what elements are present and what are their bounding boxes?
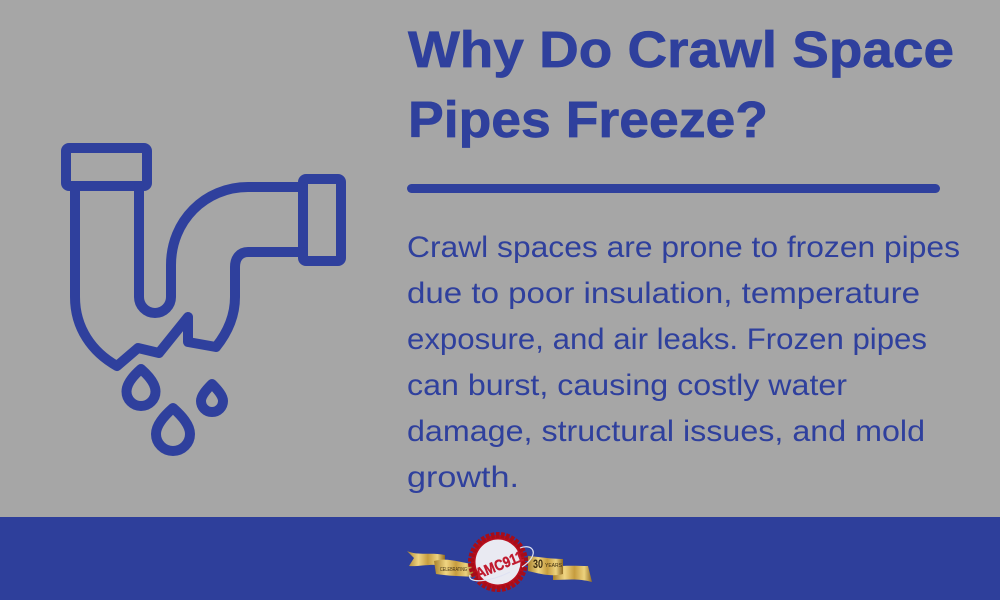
water drop bottom bbox=[156, 408, 190, 451]
title bbox=[408, 21, 954, 148]
body line 6: growth. bbox=[407, 461, 519, 494]
logo: AMC911 anniversary badge bbox=[407, 535, 592, 589]
ribbon right band bbox=[528, 556, 563, 575]
globe bbox=[476, 540, 520, 584]
body line 2: due to poor insulation, temperature bbox=[407, 277, 920, 310]
left pipe cap bbox=[66, 148, 147, 186]
body line 3: exposure, and air leaks. Frozen pipes bbox=[407, 323, 927, 356]
divider rule bbox=[407, 184, 940, 193]
body line 5: damage, structural issues, and mold bbox=[407, 415, 925, 448]
body line 1: Crawl spaces are prone to frozen pipes bbox=[407, 231, 960, 264]
word years: YEARS bbox=[545, 563, 563, 569]
water drop left bbox=[126, 369, 156, 406]
number 30: 30 bbox=[533, 557, 543, 571]
orbit swoosh bbox=[470, 547, 533, 581]
ribbon right tail bbox=[553, 566, 592, 582]
right pipe cap bbox=[303, 179, 341, 261]
body line 4: can burst, causing costly water bbox=[407, 369, 847, 402]
ribbon text right bbox=[533, 557, 563, 571]
title line 1: Why Do Crawl Space bbox=[408, 21, 954, 78]
body text bbox=[407, 231, 960, 494]
ribbon left band bbox=[434, 560, 474, 577]
footer band bbox=[0, 517, 1000, 600]
title line 2: Pipes Freeze? bbox=[408, 91, 768, 148]
icon: burst pipe with drops bbox=[66, 148, 341, 451]
rosette bbox=[471, 535, 525, 589]
brand name: AMC911 bbox=[473, 548, 526, 583]
water drop right bbox=[201, 384, 223, 412]
ribbon text left: CELEBRATING bbox=[440, 567, 467, 573]
ribbon left tail bbox=[407, 551, 445, 566]
broken pipe body bbox=[75, 186, 303, 366]
